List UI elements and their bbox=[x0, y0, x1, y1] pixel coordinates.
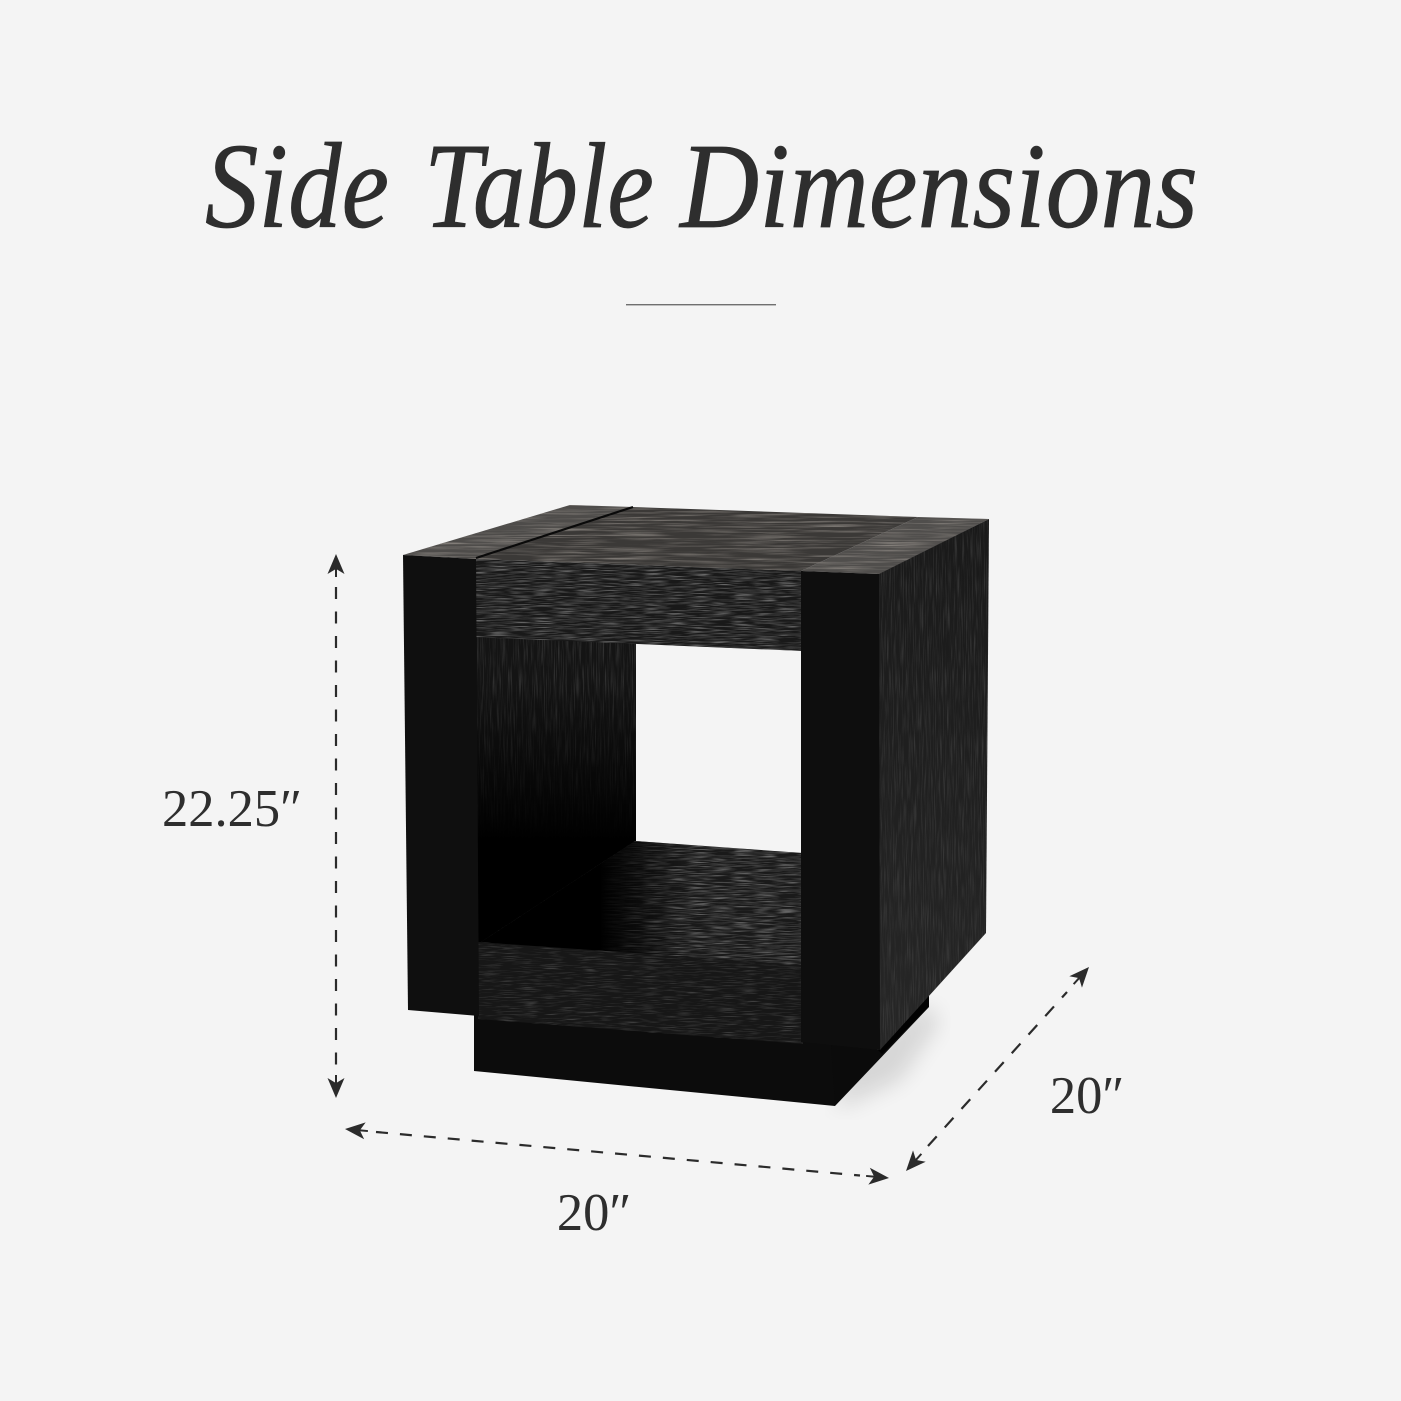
upper front rail bbox=[470, 559, 803, 651]
title: Dimensions bbox=[678, 119, 1198, 254]
table top bbox=[403, 505, 989, 574]
lower front rail bbox=[478, 942, 803, 1044]
inner shelf bbox=[478, 841, 803, 968]
depth arrow bbox=[900, 961, 1095, 1177]
right side face bbox=[877, 519, 989, 1050]
floor shadow bbox=[835, 1005, 940, 1110]
left front post bbox=[403, 555, 479, 1016]
title: Side bbox=[205, 119, 389, 254]
side table product bbox=[403, 505, 989, 1110]
width arrow bbox=[344, 1121, 890, 1186]
title divider bbox=[626, 304, 776, 305]
right front post bbox=[801, 571, 880, 1050]
title: Table bbox=[424, 119, 654, 254]
title bbox=[205, 119, 1198, 254]
height label: 22.25″ bbox=[162, 780, 302, 838]
width label: 20″ bbox=[557, 1184, 631, 1242]
depth label: 20″ bbox=[1050, 1067, 1124, 1125]
height arrow bbox=[328, 554, 344, 1098]
back inner wall bbox=[470, 634, 636, 945]
plinth base bbox=[474, 993, 929, 1106]
